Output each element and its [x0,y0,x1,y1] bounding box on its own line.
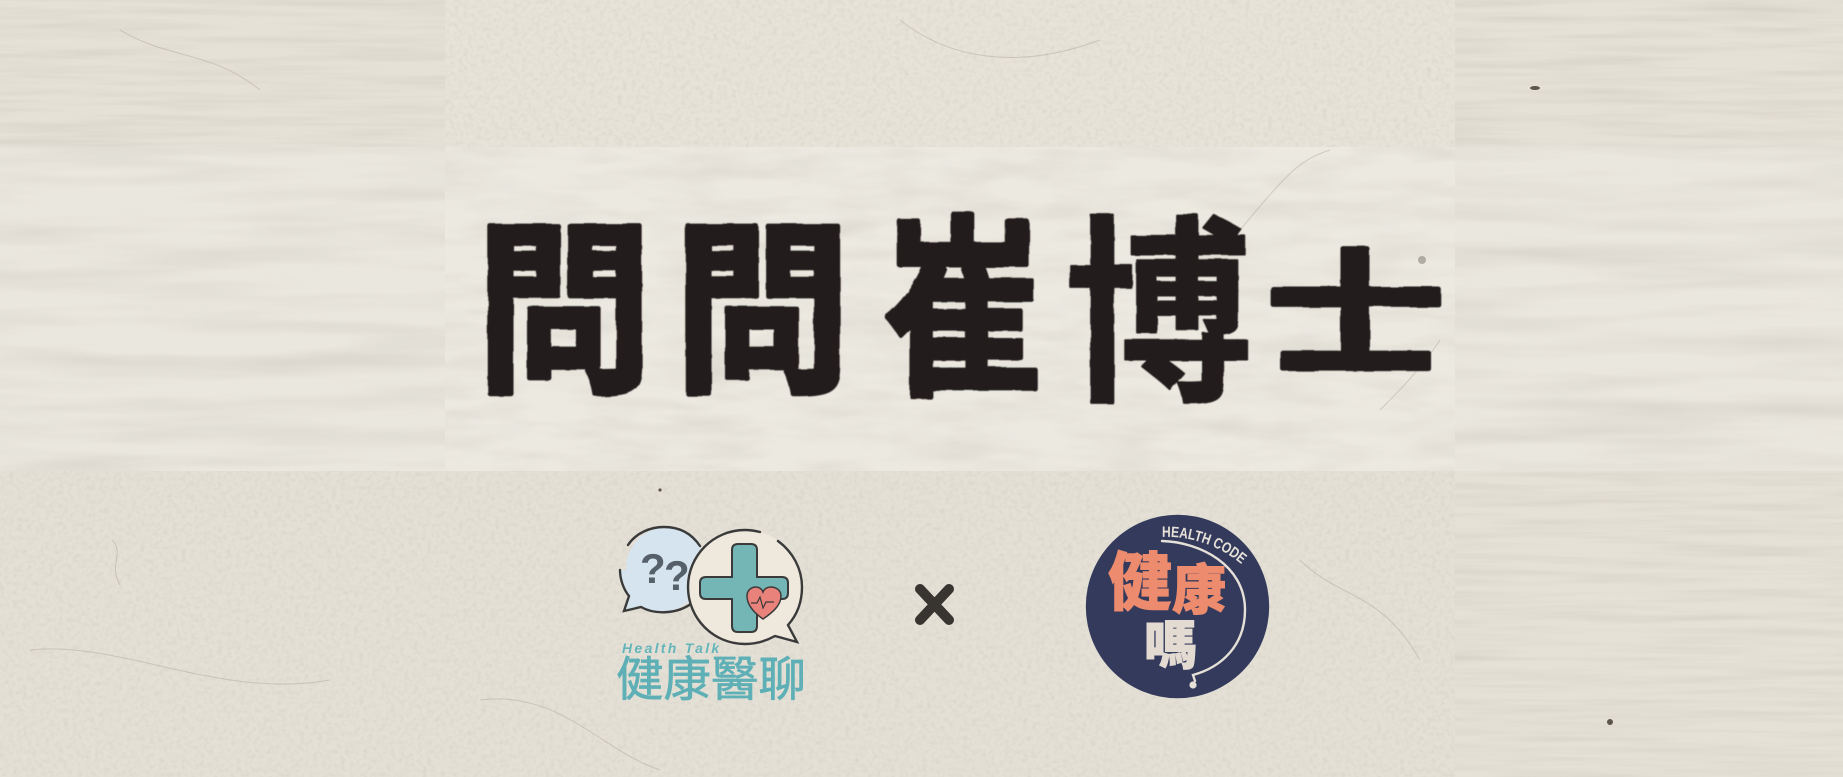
badge circle [1086,515,1269,698]
icon: question speech bubble [620,527,700,612]
badge text: 健康 [1108,547,1226,621]
icon: medical cross speech bubble [688,530,802,644]
icon: question speech bubble: ? [640,545,666,592]
logo: Health Code [1086,514,1270,698]
title: 博 [1065,205,1253,428]
badge text: 健康: 康 [1172,561,1226,621]
title: 崔 [883,203,1042,421]
title: 士 [1265,241,1445,392]
badge text: 健康: 健 [1108,547,1172,619]
icon: question speech bubble: ? [664,552,690,599]
arc tagline: HEALTH CODE: HEALTH CODE [1162,526,1248,564]
badge text: 嗎: 嗎 [1144,617,1197,676]
title [476,203,1445,428]
title: 問 [476,210,653,417]
question mark dot [1189,681,1197,689]
title: 問 [674,210,851,417]
icon: cross symbol [920,589,949,620]
logo: Health Talk [616,527,806,707]
question mark curve [1162,541,1245,681]
logo text: 健康醫聊: 健康醫聊 [616,654,806,707]
logo text: Health Talk: Health Talk [622,640,721,656]
icon: heart with pulse [747,587,781,619]
